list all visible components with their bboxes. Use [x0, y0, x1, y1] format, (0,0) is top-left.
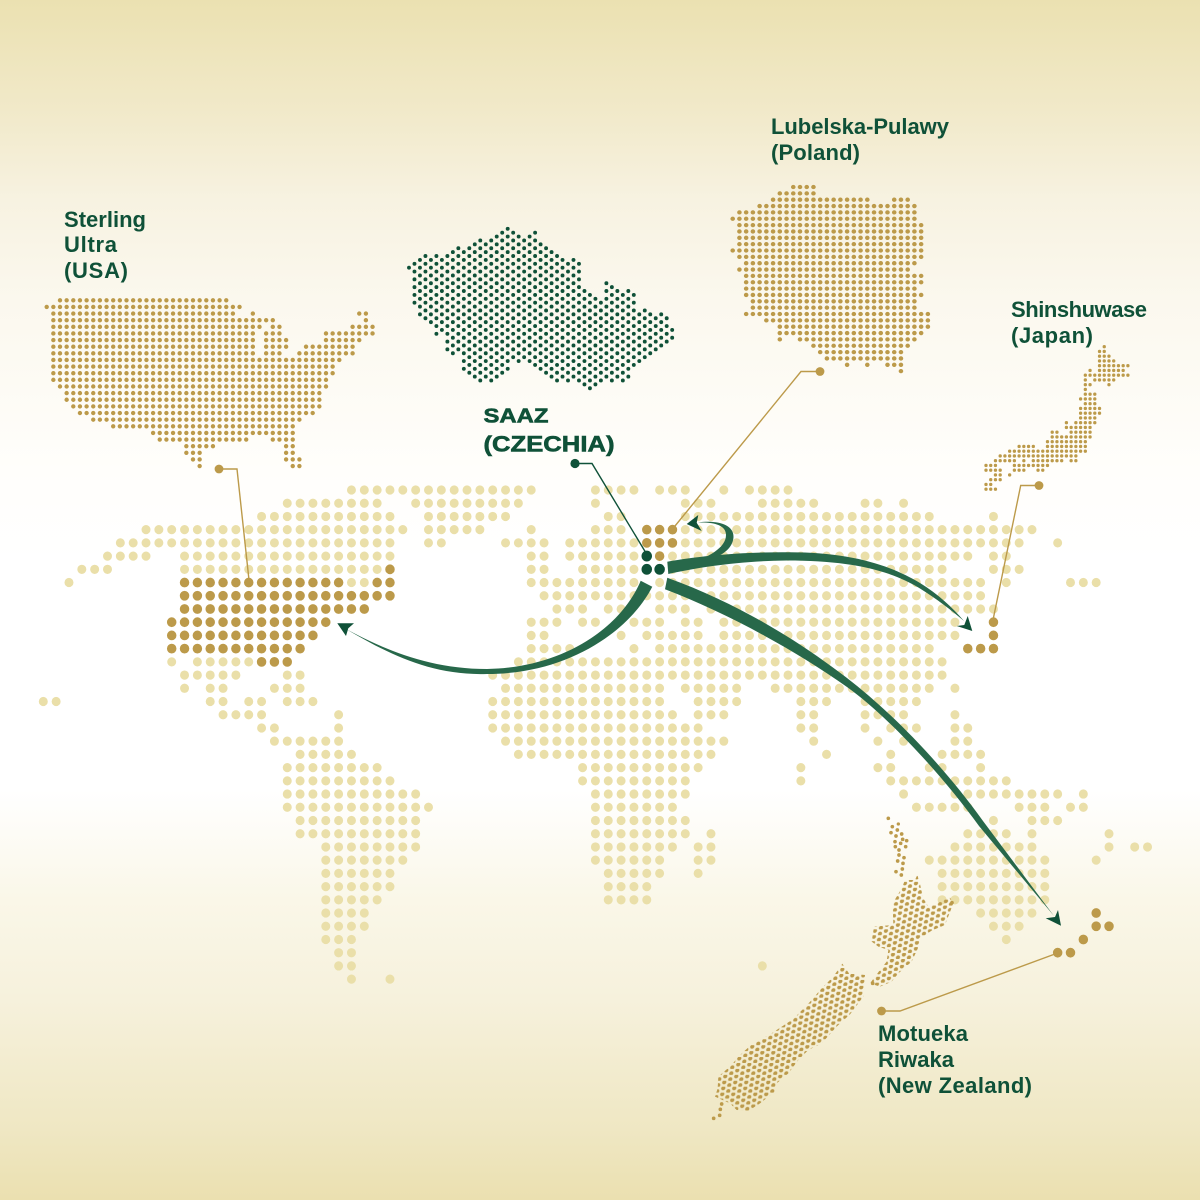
label: Shinshuwase (Japan)	[1011, 297, 1147, 348]
label: Motueka Riwaka (New Zealand)	[878, 1021, 1032, 1098]
South Island tail dots	[712, 1102, 723, 1120]
label: Motueka Riwaka (New Zealand): Motueka	[878, 1021, 969, 1046]
leader line: USA	[215, 465, 249, 580]
leader line: Japan	[993, 481, 1043, 620]
leader line: Saaz	[570, 459, 646, 553]
Poland dot map	[733, 187, 928, 371]
label: Saaz (Czechia): SAAZ	[484, 404, 548, 428]
South Island	[715, 964, 865, 1111]
world land dots	[43, 490, 1148, 979]
Czechia dots on world map	[647, 556, 660, 569]
label: Saaz (Czechia)	[484, 404, 614, 456]
Northland dots	[871, 816, 954, 985]
arrow: Czechia to Japan	[667, 552, 972, 631]
Japan dot map	[986, 347, 1128, 489]
Czechia dot map	[409, 229, 672, 388]
label: Lubelska-Pulawy (Poland): Lubelska-Pulawy	[771, 114, 950, 139]
label: Lubelska-Pulawy (Poland): (Poland)	[771, 140, 860, 165]
New Zealand dot map	[712, 816, 954, 1120]
label: Sterling Ultra (USA): (USA)	[64, 258, 128, 283]
label: Saaz (Czechia): (CZECHIA)	[484, 432, 614, 456]
label: Sterling Ultra (USA): Ultra	[64, 232, 118, 257]
label: Sterling Ultra (USA): Sterling	[64, 207, 146, 232]
label: Shinshuwase (Japan): Shinshuwase	[1011, 297, 1147, 322]
arrow: Czechia to USA	[337, 581, 652, 674]
world dot map	[43, 490, 1148, 979]
North Island	[870, 875, 953, 987]
label: Motueka Riwaka (New Zealand): Riwaka	[878, 1047, 955, 1072]
arrow: Czechia to Poland	[687, 515, 734, 564]
label: Sterling Ultra (USA)	[64, 207, 146, 283]
label: Motueka Riwaka (New Zealand): (New Zealand)	[878, 1073, 1032, 1098]
arrow: Czechia to New Zealand	[665, 578, 1061, 926]
highlighted hop regions on world map	[172, 530, 1109, 953]
USA dot map	[47, 300, 373, 466]
label: Shinshuwase (Japan): (Japan)	[1011, 323, 1093, 348]
label: Lubelska-Pulawy (Poland)	[771, 114, 950, 165]
leader line: Poland	[675, 367, 824, 526]
leader line: New Zealand	[877, 954, 1055, 1015]
